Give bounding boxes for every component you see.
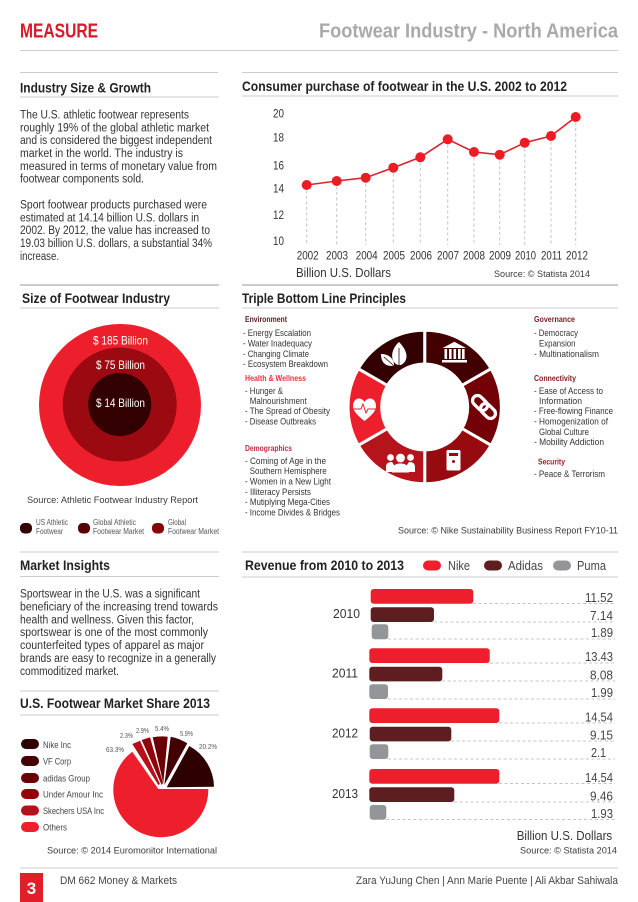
text block: industry size: roughly 19% of the global athletic market	[20, 122, 210, 134]
panel: triple bottom line principles	[242, 290, 618, 536]
text block: industry size: market in the world. The industry is	[20, 148, 183, 160]
subtitle: Footwear Industry - North America	[319, 20, 619, 42]
x axis labels: 2010	[515, 248, 536, 262]
y axis labels: 10	[273, 234, 284, 248]
legend	[21, 739, 104, 834]
x axis labels: 2009	[489, 248, 511, 262]
text block: demographics: Demographics	[245, 443, 292, 453]
legend: brands: Adidas	[508, 558, 543, 573]
authors: Zara YuJung Chen | Ann Marie Puente | Ali Akbar Sahiwala	[356, 875, 619, 887]
text block: health and wellness	[245, 373, 330, 428]
icon: leaves	[381, 342, 407, 366]
bars: 2010	[371, 589, 473, 639]
nested circles chart: $ 75 Billion	[96, 358, 145, 372]
heading: consumer purchase: Consumer purchase of footwear in the U.S. 2002 to 2012	[242, 78, 567, 94]
legend: VF Corp	[43, 756, 71, 768]
icon: bank	[442, 342, 467, 362]
legend: Global Athletic	[93, 518, 136, 527]
text block: market insights: counterfeited types of apparel as major	[20, 640, 204, 652]
text block: demographics: - Illiteracy Persists	[245, 487, 311, 498]
legend: brands: Nike	[448, 558, 470, 573]
year labels: 2013	[332, 786, 358, 801]
text block: demographics: - Women in a New Light	[245, 476, 331, 488]
heading: revenue: Revenue from 2010 to 2013	[245, 557, 404, 573]
legend: Skechers USA Inc	[43, 806, 104, 817]
text block: governance: Expansion	[539, 338, 576, 350]
legend: brands	[423, 558, 607, 573]
axis unit: Billion U.S. Dollars	[517, 828, 613, 843]
value labels: 2.1	[591, 745, 606, 760]
pie labels: 2.9%	[136, 726, 149, 735]
source: Source: © Statista 2014	[494, 269, 590, 280]
panel: industry size and growth	[20, 80, 217, 263]
value labels: 9.15	[590, 728, 613, 742]
x axis labels: 2007	[437, 248, 459, 262]
x axis labels: 2005	[383, 248, 405, 262]
y axis labels: 18	[273, 130, 284, 144]
bars: 2013	[369, 769, 499, 820]
bars: 2011	[369, 648, 490, 699]
source: Source: © 2014 Euromonitor International	[47, 846, 217, 856]
text block: governance: Governance	[534, 314, 575, 324]
y axis labels: 14	[273, 182, 284, 196]
text block: demographics	[245, 443, 340, 518]
x axis labels: 2002	[297, 248, 319, 262]
value labels: 7.14	[590, 608, 613, 623]
value labels: 11.52	[585, 590, 613, 605]
value labels: 14.54	[585, 770, 613, 785]
nested circles chart: $ 14 Billion	[96, 396, 145, 410]
text block: industry size: Sport footwear products purchased were	[20, 200, 207, 212]
course name: DM 662 Money & Markets	[60, 875, 177, 887]
pie chart	[113, 736, 214, 837]
source: Source: © Nike Sustainability Business Report FY10-11	[398, 526, 618, 536]
icon: people	[386, 454, 415, 472]
panel: market share pie	[20, 695, 217, 856]
heading: triple bottom line: Triple Bottom Line Principles	[242, 290, 406, 306]
value labels: 9.46	[590, 788, 613, 804]
text block: connectivity: - Free-flowing Finance	[534, 406, 613, 417]
text block: market insights: sportswear is one of the most commonly	[20, 627, 208, 639]
legend: Nike Inc	[43, 740, 71, 751]
text block: industry size: 2002. By 2012, the value has increased to	[20, 225, 210, 237]
pie labels: 20.2%	[199, 742, 217, 751]
legend: Footwear Market	[168, 527, 220, 536]
legend: Footwear Market	[93, 527, 145, 536]
legend: adidas Group	[43, 774, 90, 784]
legend	[20, 518, 220, 536]
text block: industry size: footwear components sold.	[20, 174, 144, 186]
text block: governance: - Democracy	[534, 328, 578, 339]
bars: 2012	[369, 708, 499, 759]
text block: connectivity: - Mobility Addiction	[534, 437, 604, 448]
text block: health and wellness: - Hunger &	[245, 386, 284, 397]
text block: market insights: beneficiary of the increasing trend towards	[20, 602, 218, 614]
text block: connectivity: - Ease of Access to	[534, 386, 603, 397]
value labels: 1.93	[591, 806, 613, 821]
y axis labels	[273, 106, 284, 248]
legend: Under Amour Inc	[43, 790, 103, 800]
page number	[20, 873, 43, 902]
x axis labels: 2011	[541, 248, 562, 262]
text block: connectivity: Information	[539, 396, 582, 407]
text block: environment: - Water Inadequacy	[243, 338, 312, 350]
text block: market insights: health and wellness. Given this factor,	[20, 614, 194, 626]
text block: security: - Peace & Terrorism	[534, 469, 605, 480]
footer	[20, 873, 619, 902]
text block: connectivity: Connectivity	[534, 373, 576, 383]
text block: environment: - Energy Escalation	[243, 328, 311, 339]
panel: revenue bar chart	[245, 557, 617, 856]
text block: market insights: commoditized market.	[20, 666, 119, 678]
text block: health and wellness: Health & Wellness	[245, 373, 306, 383]
text block: demographics: - Income Divides & Bridges	[245, 508, 340, 518]
x axis labels: 2003	[326, 248, 348, 262]
text block: industry size	[20, 110, 217, 263]
text block: market insights	[20, 589, 218, 678]
pie labels: 63.3%	[106, 745, 124, 754]
text block: environment: - Changing Climate	[243, 349, 309, 360]
donut chart	[348, 330, 501, 484]
text block: connectivity: Global Culture	[539, 427, 589, 438]
y axis labels: 16	[273, 158, 284, 172]
icon: chain link	[470, 393, 498, 421]
text block: health and wellness: - Disease Outbreaks	[245, 416, 316, 428]
text block: industry size: measured in terms of monetary value from	[20, 161, 217, 173]
pie labels: 5.9%	[180, 729, 193, 738]
heading: market share: U.S. Footwear Market Share 2013	[20, 695, 210, 711]
value labels: 1.89	[591, 625, 613, 640]
icon: lock	[446, 450, 460, 470]
icon: heart	[353, 399, 376, 421]
panel: market insights	[20, 557, 218, 678]
line chart	[302, 112, 581, 245]
nested circles chart: $ 185 Billion	[93, 334, 148, 348]
text block: environment: Environment	[245, 314, 287, 324]
page number: 3	[27, 879, 36, 898]
value labels: 1.99	[591, 685, 613, 700]
heading: size: Size of Footwear Industry	[22, 290, 170, 306]
y axis labels: 20	[273, 106, 284, 120]
text block: industry size: and is considered the biggest independent	[20, 135, 213, 147]
text block: security: Security	[538, 456, 565, 466]
text block: demographics: - Coming of Age in the	[245, 456, 326, 467]
text block: industry size: increase.	[20, 251, 59, 263]
text block: demographics: Southern Hemisphere	[250, 466, 327, 477]
pie labels: 2.3%	[120, 731, 133, 740]
year labels: 2010	[333, 606, 360, 621]
x axis labels: 2008	[463, 248, 485, 262]
text block: market insights: Sportswear in the U.S. was a significant	[20, 589, 201, 601]
legend: US Athletic	[36, 518, 68, 527]
text block: environment	[243, 314, 328, 370]
source: Source: © Statista 2014	[520, 846, 617, 856]
text block: market insights: brands are easy to recognize in a generally	[20, 653, 216, 665]
heading: market insights: Market Insights	[20, 557, 110, 573]
text block: demographics: - Mutiplying Mega-Cities	[245, 497, 330, 508]
value labels	[585, 590, 613, 821]
x axis labels: 2012	[566, 248, 588, 262]
text block: security	[534, 456, 605, 480]
y axis labels: 12	[273, 208, 284, 222]
year labels	[332, 606, 360, 801]
text block: health and wellness: - The Spread of Obesity	[245, 406, 330, 417]
pie labels: 5.4%	[155, 724, 169, 733]
text block: health and wellness: Malnourishment	[250, 396, 307, 407]
year labels: 2011	[332, 666, 358, 681]
legend: Others	[43, 822, 67, 834]
dashed guides	[386, 604, 615, 820]
text block: environment: - Ecosystem Breakdown	[243, 359, 328, 370]
value labels: 8.08	[590, 668, 613, 682]
x axis labels	[297, 248, 588, 262]
year labels: 2012	[332, 726, 358, 741]
source: Source: Athletic Footwear Industry Report	[27, 495, 198, 506]
heading: industry size: Industry Size & Growth	[20, 80, 151, 96]
value labels: 13.43	[585, 649, 613, 664]
text block: industry size: 19.03 billion U.S. dollars, a substantial 34%	[20, 238, 212, 250]
x axis labels: 2006	[410, 248, 432, 262]
legend: Footwear	[36, 527, 63, 536]
nested circles chart	[39, 324, 201, 486]
text block: governance: - Multinationalism	[534, 349, 599, 360]
value labels: 14.54	[585, 710, 613, 724]
pie labels	[106, 724, 217, 754]
text block: connectivity	[534, 373, 613, 448]
legend: Global	[168, 518, 186, 527]
title: MEASURE	[20, 20, 98, 42]
text block: connectivity: - Homogenization of	[534, 416, 608, 428]
legend: brands: Puma	[577, 558, 607, 573]
x axis labels: 2004	[356, 248, 378, 262]
text block: industry size: estimated at 14.14 billion U.S. dollars in	[20, 212, 199, 224]
panel: size of footwear industry	[20, 290, 220, 536]
axis unit: Billion U.S. Dollars	[296, 265, 391, 280]
text block: industry size: The U.S. athletic footwear represents	[20, 110, 189, 122]
text block: governance	[534, 314, 599, 360]
panel: consumer purchase line chart	[242, 78, 590, 280]
